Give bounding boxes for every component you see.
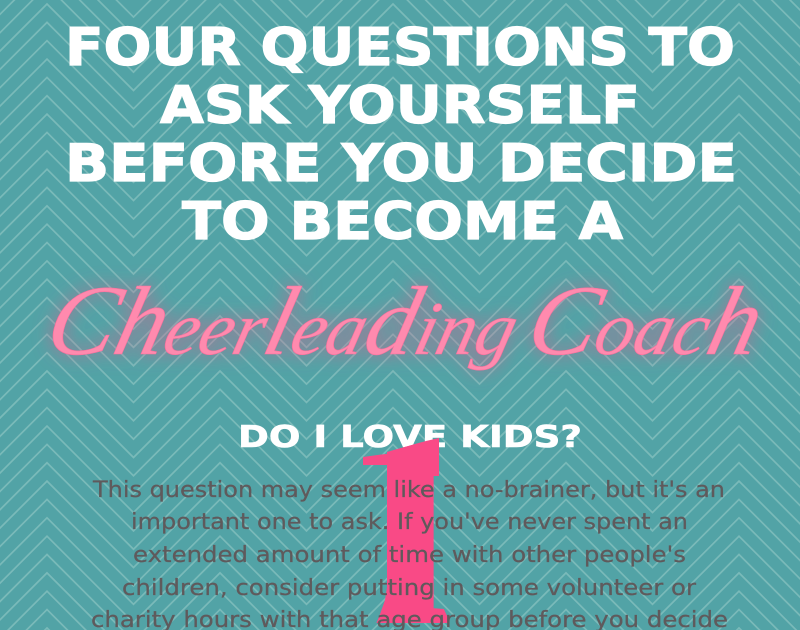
number 1 bbox=[363, 438, 448, 623]
title: BEFORE YOU DECIDE bbox=[65, 134, 737, 194]
body text: extended amount of time with other people's bbox=[133, 542, 686, 568]
body text: This question may seem like a no-brainer, but it's an bbox=[92, 477, 725, 503]
script subtitle: Cheerleading Coach bbox=[37, 265, 775, 376]
title: FOUR QUESTIONS TO bbox=[65, 18, 735, 78]
heading: Do I love kids: DO I LOVE KIDS? bbox=[238, 420, 582, 455]
body text bbox=[91, 477, 728, 630]
body text: children, consider putting in some volunteer or bbox=[122, 575, 697, 601]
script subtitle: Cheerleading Coach: Coach bbox=[518, 265, 775, 376]
body text: important one to ask. If you've never spent an bbox=[131, 509, 688, 535]
script subtitle: Cheerleading Coach: Cheerleading bbox=[37, 265, 532, 376]
script subtitle: Cheerleading Coach: Coach bbox=[518, 265, 775, 376]
script subtitle: Cheerleading Coach: Cheerleading bbox=[37, 265, 532, 376]
title: TO BECOME A bbox=[182, 192, 623, 252]
title bbox=[65, 18, 737, 252]
title: ASK YOURSELF bbox=[160, 76, 640, 136]
